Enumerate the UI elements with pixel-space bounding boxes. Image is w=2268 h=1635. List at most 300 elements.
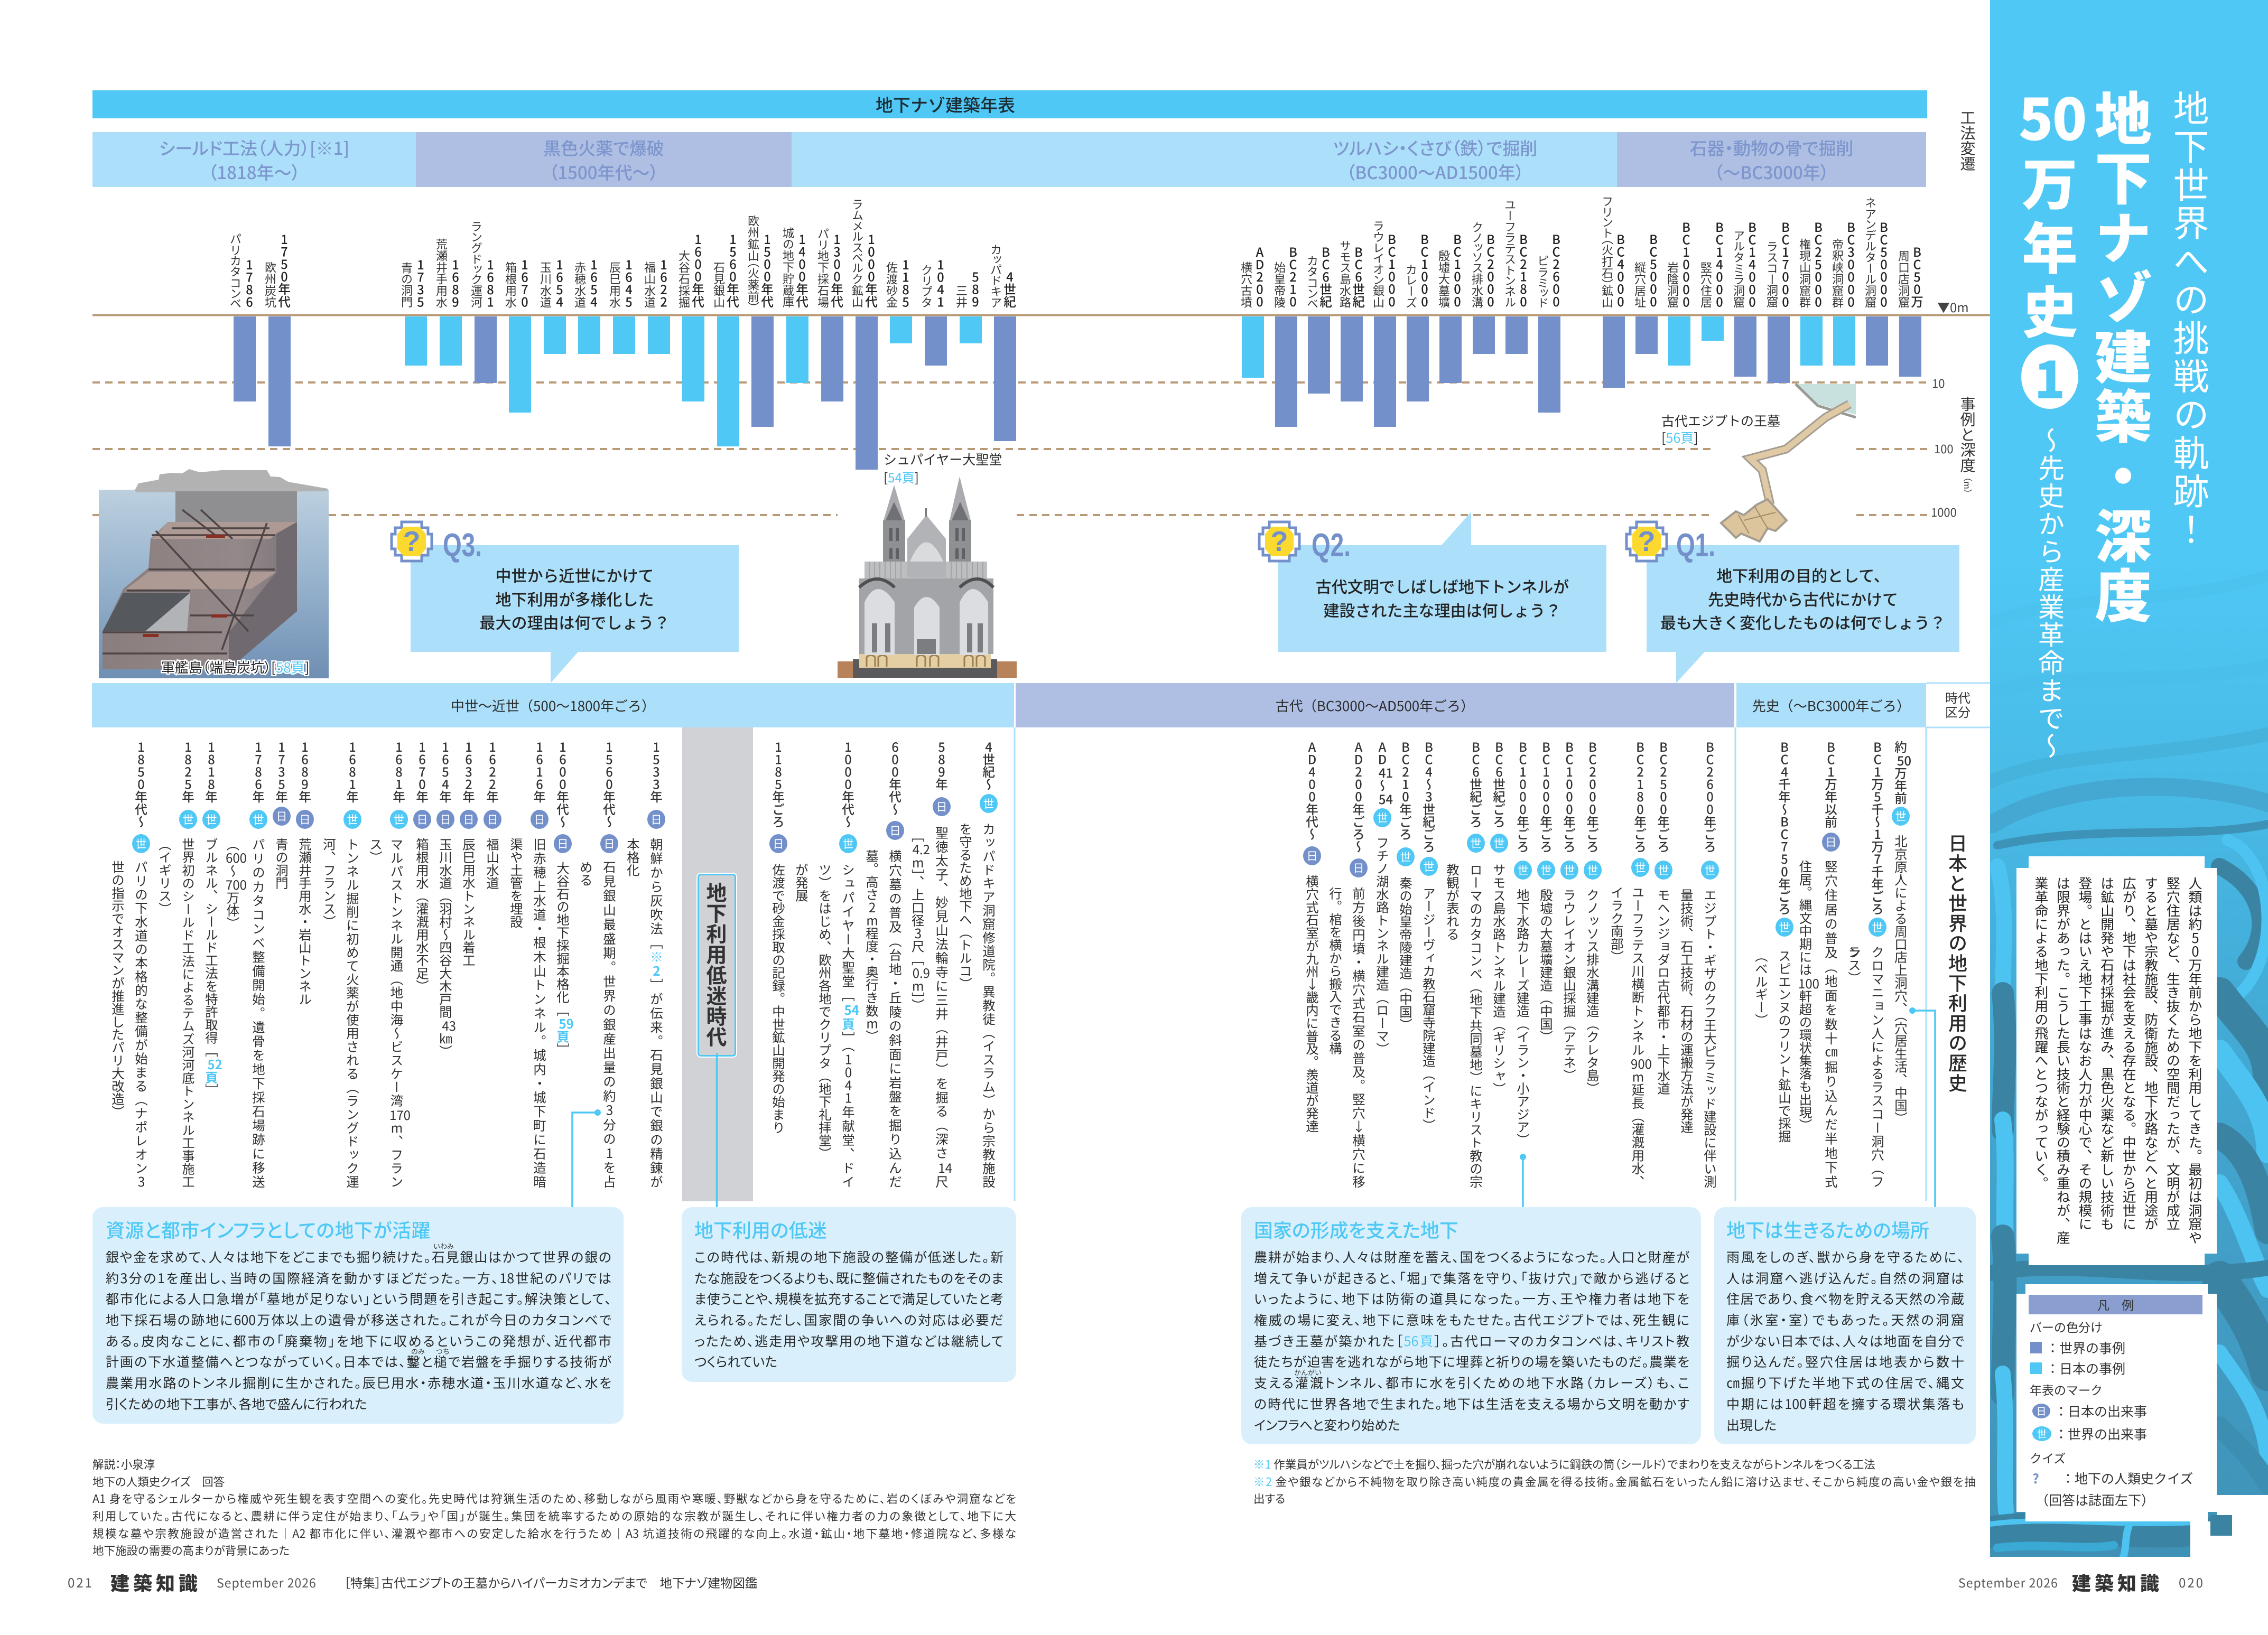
illustration caption: 軍艦島: 軍艦島（端島炭坑）[58頁] bbox=[161, 657, 309, 677]
notes: commentary and quiz answers: 規模な墓や宗教施設が造営された｜A2 都市化に伴い、灌漑や都市への安定した給水を行うため｜A3 坑道技術の飛躍的な向上。水道・鉱山・地下墓地・修道院など、多様な bbox=[92, 1525, 1016, 1541]
timeline: 1825年: （イギリス） bbox=[156, 838, 174, 915]
panel: introduction text: 広がり、地下は社会を支える存在となる。中世から近世に bbox=[2120, 876, 2139, 1231]
legend badge: japan: 日 bbox=[2036, 1404, 2046, 1418]
timeline: 1654年 bbox=[434, 740, 457, 1189]
bar: 福山水道 bbox=[642, 258, 673, 354]
body text: の時代に世界各地で生まれた。地下は生活を支える場から文明を動かす bbox=[1254, 1394, 1689, 1413]
bar: カッパドキア: 4世紀 bbox=[1001, 270, 1019, 308]
timeline: BC6世紀 Samos: BC6世紀ごろ bbox=[1490, 741, 1508, 828]
axis label: 工法変遷: 工法変遷 bbox=[1957, 110, 1979, 171]
timeline: BC2600: 量技術、石工技術、石材の運搬方法が発達 bbox=[1678, 889, 1696, 1134]
timeline: BC1000 Qanat: 地下水路カレーズ建造（イラン・小アジア） bbox=[1514, 889, 1532, 1146]
bar: カレーズ: BC1000 bbox=[1416, 233, 1434, 308]
panel: introduction text bbox=[2016, 856, 2217, 1265]
timeline: 1818年: 52 bbox=[207, 1054, 222, 1073]
timeline: 1670年: 1670年 bbox=[413, 741, 431, 803]
timeline: 1850年代: 世 bbox=[135, 836, 147, 852]
footer: right page: September 2026 bbox=[1958, 1573, 2058, 1591]
bar: 赤穂水道 bbox=[572, 258, 603, 354]
timeline: BC1万年以前: 住居。縄文中期には 軒超の環状集落も出現） bbox=[1796, 860, 1815, 1132]
panel: legend: バーの色分け bbox=[2030, 1318, 2103, 1335]
bar: ラスコー洞窟 bbox=[1768, 190, 1790, 383]
timeline: 1600年代: 大谷石の地下採掘本格化［ 頁 ］ bbox=[554, 862, 572, 1056]
timeline: 1632年: 辰巳用水トンネル着工 bbox=[460, 838, 478, 967]
timeline: 約50万年前 bbox=[1889, 740, 1912, 1189]
method band: shield bbox=[92, 132, 416, 187]
quiz Q3 text: 地下利用が多様化した bbox=[496, 586, 654, 610]
scale label: 100: 100 bbox=[1934, 440, 1954, 457]
timeline: 1850年代: パリの下水道の本格的な整備が始まる（ナポレオン3 bbox=[132, 861, 151, 1188]
quiz Q3 icon bbox=[390, 520, 433, 563]
timeline: 1632年: 1632年 bbox=[460, 741, 478, 803]
panel: 国家の形成 bbox=[1241, 1207, 1701, 1444]
period band: prehistory bbox=[1736, 683, 1926, 727]
body text: 増えて争いが起きると、「堀」で集落を守り、「抜け穴」で敵から逃げると bbox=[1254, 1268, 1689, 1287]
timeline: BC1万5千: BC1万5千〜1万7千年ごろ bbox=[1869, 741, 1886, 915]
gray strip: 低迷 period bbox=[682, 727, 753, 1201]
bar: パリ地下採石場 bbox=[821, 190, 843, 401]
timeline: 600年代 bbox=[860, 740, 907, 1189]
quiz Q1 text: 地下利用の目的として、 bbox=[1716, 563, 1890, 586]
timeline: BC1000 Yinxu bbox=[1535, 740, 1558, 1189]
body text: 都市化による人口急増が「墓地が足りない」という問題を引き起こす。解決策として、 bbox=[106, 1289, 611, 1308]
timeline: 1818年: 1818年 bbox=[202, 741, 220, 803]
timeline: AD41〜54: AD 〜 bbox=[1373, 741, 1391, 792]
bar: 青の洞門: 青の洞門 bbox=[398, 262, 415, 308]
timeline: 1689年: 1689年 bbox=[296, 741, 314, 803]
side panel: marble background bbox=[1990, 0, 2268, 1557]
bar: フリント鉱山 bbox=[1603, 190, 1625, 388]
bar: 始皇帝陵: 始皇帝陵 bbox=[1271, 261, 1288, 308]
timeline: 1622年: 福山水道 bbox=[484, 838, 502, 890]
bar: 欧州炭坑 bbox=[262, 233, 293, 446]
timeline: 1622年 bbox=[481, 740, 504, 1189]
timeline: 約50万年前: 約 万年前 bbox=[1892, 741, 1910, 804]
bar: 殷墟大墓壙: BC1000 bbox=[1448, 233, 1466, 308]
timeline: 1600年代 bbox=[551, 740, 574, 1189]
timeline: BC1000 Laurion: BC1000年ごろ bbox=[1560, 741, 1578, 853]
scale label: 0m: ▼0m bbox=[1937, 297, 1969, 316]
body text: 約3分の1を産出し、当時の国際経済を動かすほどだった。一方、18世紀のパリでは bbox=[106, 1268, 611, 1287]
bar: 竪穴住居: 竪穴住居 bbox=[1698, 261, 1715, 308]
bar: 佐渡砂金: 佐渡砂金 bbox=[884, 261, 900, 308]
timeline: BC1万年以前 bbox=[1796, 740, 1843, 1189]
notes: footnotes: ※2 金や銀などから不純物を取り除き高い純度の貴金属を得る技術。金属鉱石をいったん鉛に溶け込ませ、そこから純度の高い金や銀を抽 bbox=[1253, 1473, 1976, 1490]
footer: left page bbox=[68, 1572, 770, 1593]
timeline: AD41〜54 bbox=[1371, 740, 1394, 1189]
bar: 青の洞門: 1735 bbox=[412, 258, 430, 308]
timeline: 1681年 Malpas: 1681年 bbox=[390, 741, 408, 803]
footer: left page: 建築知識 bbox=[110, 1568, 201, 1596]
timeline: 1616年: 1616年 bbox=[531, 741, 549, 803]
timeline: BC2000 bbox=[1581, 740, 1604, 1189]
side title: subtitle: 〜先史から産業革命まで〜 bbox=[2032, 427, 2070, 760]
timeline: BC2180 bbox=[1605, 740, 1652, 1189]
timeline: 589年: 日 bbox=[936, 799, 947, 815]
timeline: 1616年: 渠や土管を埋設 bbox=[507, 838, 526, 928]
chart: depth bars with labels bbox=[227, 196, 1926, 470]
quiz Q2 icon bbox=[1258, 520, 1301, 563]
scale label: 1000: 1000 bbox=[1931, 503, 1957, 520]
bar: 石見銀山: 石見銀山 bbox=[711, 261, 728, 308]
footer: left page: ［特集］古代エジプトの王墓からハイパーカミオカンデまで 地下ナゾ建物図鑑 bbox=[344, 1573, 757, 1591]
notes: footnotes: 出する bbox=[1253, 1490, 1285, 1507]
period band: prehistory: 先史（〜BC3000年ごろ） bbox=[1752, 695, 1910, 715]
footer: right page: 020 bbox=[2179, 1573, 2205, 1591]
body text: 地下採石場の跡地に600万体以上の遺骨が移送された。これが今日のカタコンベで bbox=[106, 1310, 611, 1329]
timeline: 1000年代: ツ）をはじめ、欧州各地でクリプタ（地下礼拝堂） bbox=[816, 863, 834, 1160]
bar: 赤穂水道: 赤穂水道 bbox=[572, 261, 589, 308]
bar: 縦穴居址: 縦穴居址 bbox=[1632, 261, 1649, 308]
illustration caption: tomb bbox=[1661, 412, 1782, 447]
timeline: BC6世紀 Samos bbox=[1488, 740, 1511, 1189]
bar: ユーフラテストンネル: ユーフラテストンネル bbox=[1502, 199, 1519, 308]
bar: ラングドック運河: 1681 bbox=[481, 258, 499, 308]
bar: 箱根用水: 箱根用水 bbox=[503, 261, 519, 308]
timeline: 600年代: 墓。高さ2m程度・奥行き数m） bbox=[863, 849, 881, 1043]
quiz Q3 text: 最大の理由は何でしょう？ bbox=[480, 610, 670, 633]
bar: ラングドック運河 bbox=[468, 221, 499, 383]
bar: 大谷石採掘: 大谷石採掘 bbox=[676, 250, 693, 308]
timeline: 1689年: 荒瀬井手用水・岩山トンネル bbox=[296, 838, 314, 1005]
timeline: BC1000 Laurion bbox=[1558, 740, 1581, 1189]
timeline: 1786年: （ 〜 万体） bbox=[224, 838, 242, 930]
body text: ある。皮肉なことに、都市の「廃棄物」を地下に収めるというこの発想が、近代都市 bbox=[106, 1331, 611, 1350]
bar: 辰巳用水 bbox=[607, 258, 638, 354]
legend badge: world bbox=[2032, 1426, 2051, 1441]
bar: 権現山洞窟群 bbox=[1800, 190, 1823, 366]
bar: カタコンベ: BC6世紀 bbox=[1317, 246, 1335, 308]
timeline: 1681年 Malpas: 170 bbox=[389, 1105, 411, 1123]
timeline: BC1000 Laurion: 世 bbox=[1564, 862, 1575, 878]
method band: stone tools: （〜BC3000年） bbox=[1714, 159, 1829, 184]
body text: 基づき王墓が築かれた［56頁］。古代ローマのカタコンベは、キリスト教 bbox=[1254, 1331, 1689, 1350]
timeline: 1632年: 日 bbox=[463, 811, 475, 827]
timeline: 1818年 bbox=[200, 740, 223, 1189]
timeline: 1850年代 bbox=[106, 740, 153, 1189]
timeline: BC210: 秦の始皇帝陵建造（中国） bbox=[1397, 876, 1415, 1031]
timeline: 1670年: 箱根用水（灌漑用水不足） bbox=[413, 838, 432, 993]
illustration caption: tomb: [56頁] bbox=[1661, 428, 1698, 447]
footer: right page: 建築知識 bbox=[2072, 1568, 2163, 1596]
panel: introduction text: は限界があった。こうした長い技術と経験の積み重ねが、産 bbox=[2053, 876, 2073, 1245]
timeline: 1681年 Languedoc: トンネル掘削に初めて火薬が使用される（ラングドック運 bbox=[343, 838, 362, 1188]
timeline: 1786年: 700 bbox=[226, 875, 247, 893]
timeline: 1185年: 1185年ごろ bbox=[769, 741, 787, 828]
timeline: 1786年: パリのカタコンベ整備開始。遺骨を地下採石場跡に移送 bbox=[249, 838, 268, 1188]
timeline: 1000年代 bbox=[790, 740, 860, 1189]
panel: legend: クイズ bbox=[2030, 1449, 2066, 1466]
timeline: 1735年: 日 bbox=[276, 808, 287, 824]
timeline: BC210: 世 bbox=[1400, 849, 1411, 865]
timeline: 1681年 Languedoc: 世 bbox=[347, 811, 358, 827]
notes: commentary and quiz answers: 地下の人類史クイズ 回答 bbox=[92, 1473, 225, 1490]
connector lines with dots bbox=[565, 1004, 1945, 1215]
timeline: 1654年: 43 bbox=[442, 1016, 456, 1034]
timeline: 約50万年前: 50 bbox=[1897, 751, 1911, 769]
timeline: 1600年代: 日 bbox=[557, 836, 569, 852]
timeline: 1735年: 1735年 bbox=[273, 741, 291, 803]
body text: 雨風をしのぎ、獣から身を守るために、 bbox=[1726, 1247, 1964, 1266]
bar: 城の地下貯蔵庫: 1400年代 bbox=[793, 233, 811, 308]
timeline: BC1000 Qanat bbox=[1511, 740, 1535, 1189]
timeline: AD41〜54: 54 bbox=[1379, 789, 1393, 808]
body text: 掘り込んだ。竪穴住居は地表から数十 bbox=[1726, 1352, 1964, 1371]
quiz Q2 label: Q2. bbox=[1312, 527, 1351, 564]
timeline: AD400 bbox=[1300, 740, 1324, 1189]
timeline: 1786年: 世 bbox=[253, 811, 264, 827]
quiz Q1 text: 先史時代から古代にかけて bbox=[1708, 586, 1898, 610]
bar: ネアンデルタール洞窟: ネアンデルタール洞窟 bbox=[1862, 197, 1879, 308]
bar: 三井 bbox=[960, 190, 982, 343]
timeline: 1786年: 600 bbox=[226, 848, 247, 866]
bar: 荒瀬井手用水 bbox=[433, 238, 464, 366]
timeline: 589年: ［ m］、上口径3尺［ m］） bbox=[909, 829, 927, 1012]
period band label bbox=[1929, 690, 1987, 718]
timeline: 1681年 Languedoc: 1681年 bbox=[343, 741, 361, 803]
timeline: 約50万年前: 北京原人による周口店上洞穴、（穴居生活、中国） bbox=[1892, 835, 1910, 1125]
bar: 横穴古墳: AD200 bbox=[1251, 246, 1269, 308]
quiz Q1 label: Q1. bbox=[1676, 527, 1715, 564]
timeline: BC1万5千 bbox=[1843, 740, 1889, 1189]
timeline: BC2180: 世 bbox=[1635, 859, 1646, 875]
timeline: BC2180: BC2180年ごろ bbox=[1631, 741, 1649, 853]
timeline: 1185年 bbox=[767, 740, 790, 1189]
body text: 中期には100軒超を擁する環状集落も bbox=[1726, 1394, 1964, 1413]
axis label: 事例と深度: 事例と深度 （m） bbox=[1957, 396, 1979, 498]
panel: legend: ：世界の事例 bbox=[2046, 1338, 2125, 1357]
timeline: BC2600 bbox=[1675, 740, 1722, 1189]
timeline: 589年: 4.2 bbox=[913, 839, 930, 858]
period band label: 時代 bbox=[1945, 688, 1970, 706]
body text: ま使うことや、規模を拡充することで満足していたと考 bbox=[694, 1289, 1003, 1308]
bar: クリプタ: 1041 bbox=[932, 258, 950, 308]
bar: 玉川水道 bbox=[537, 258, 569, 354]
bar: ラスコー洞窟: ラスコー洞窟 bbox=[1764, 241, 1781, 308]
heading: 国家の形成を支えた地下 bbox=[1254, 1216, 1458, 1243]
timeline: AD200: 行。棺を横から搬入できる構 bbox=[1326, 887, 1345, 1054]
timeline: BC2500: 世 bbox=[1658, 862, 1669, 878]
period band: ancient: 古代（BC3000〜AD500年ごろ） bbox=[1276, 695, 1474, 715]
bar: ラウレイオン銀山: ラウレイオン銀山 bbox=[1370, 220, 1387, 308]
body text: つくられていた bbox=[694, 1352, 777, 1371]
bar: ラングドック運河: ラングドック運河 bbox=[468, 221, 485, 308]
body text: 住居であり、食べ物を貯える天然の冷蔵 bbox=[1726, 1289, 1964, 1308]
quiz Q3 speech bubble bbox=[411, 545, 739, 684]
timeline: 1818年: ブルネル、シールド工法を特許取得［ 頁 ］ bbox=[202, 838, 221, 1097]
timeline: 1533年: 1533年 bbox=[647, 741, 665, 803]
timeline: BC4千年: 世 bbox=[1779, 919, 1790, 935]
timeline: BC1000 Qanat: BC1000年ごろ bbox=[1514, 741, 1532, 853]
method band: stone tools: 石器・動物の骨で掘削 bbox=[1690, 135, 1853, 160]
panel: 地下利用の低迷 bbox=[682, 1207, 1016, 1382]
timeline: 1533年: 本格化 bbox=[624, 838, 643, 876]
timeline: BC4〜3世紀: BC4〜3世紀ごろ bbox=[1420, 741, 1438, 853]
timeline: BC1万年以前: BC1万年以前 bbox=[1822, 741, 1840, 828]
bar: 辰巳用水: 1645 bbox=[620, 258, 638, 308]
timeline: BC6世紀 Rome bbox=[1441, 740, 1488, 1189]
timeline: 1600年代: 1600年代〜 bbox=[554, 741, 572, 828]
panel: legend bbox=[2016, 1284, 2217, 1521]
timeline: 1560年代: 石見銀山最盛期。世界の銀産出量の約3分の1を占 bbox=[600, 861, 619, 1188]
bar: 荒瀬井手用水: 1689 bbox=[447, 258, 464, 308]
timeline: 1681年 Malpas bbox=[364, 740, 411, 1189]
decorative small square bbox=[2210, 1515, 2232, 1536]
timeline: BC4〜3世紀: アージーヴィカ教石窟寺院建造（インド） bbox=[1420, 887, 1438, 1132]
footer: left page: September 2026 bbox=[217, 1573, 317, 1591]
body text: が少ない日本では、人々は地面を自分で bbox=[1726, 1331, 1964, 1350]
body text: 引くための地下工事が、各地で盛んに行われた bbox=[106, 1394, 367, 1413]
callout: 地下利用低迷時代: 地下利用低迷時代 bbox=[702, 882, 731, 1047]
timeline: 589年 bbox=[907, 740, 953, 1189]
illustration caption: Speyer bbox=[884, 450, 1002, 486]
side title: lead: 地下世界への挑戦の軌跡！ bbox=[2165, 90, 2217, 549]
bar: 欧州鉱山 bbox=[751, 190, 774, 427]
body text: 人は洞窟へ逃げ込んだ。自然の洞窟は bbox=[1726, 1268, 1964, 1287]
period band: ancient bbox=[1016, 683, 1734, 727]
scale label: 10: 10 bbox=[1932, 375, 1945, 391]
timeline: 4世紀: を守るため地下へ（トルコ） bbox=[956, 823, 975, 990]
timeline: AD41〜54: 世 bbox=[1377, 810, 1388, 826]
timeline: BC1000 Yinxu: 殷墟の大墓壙建造（中国） bbox=[1537, 889, 1556, 1043]
side title: main line 2: 50 bbox=[2019, 74, 2086, 157]
timeline: 4世紀 bbox=[954, 740, 1000, 1189]
bar: フリント鉱山: フリント（火打石）鉱山 bbox=[1599, 196, 1616, 308]
bar: 石見銀山 bbox=[711, 233, 742, 446]
timeline: 1670年: 日 bbox=[416, 811, 428, 827]
timeline: AD41〜54: 41 bbox=[1379, 763, 1393, 781]
panel: legend: ：世界の出来事 bbox=[2055, 1424, 2147, 1443]
bar: 箱根用水 bbox=[503, 258, 534, 413]
panel: 地下は生きるための場所 bbox=[1714, 1207, 1976, 1444]
timeline: BC2000: クノッソス排水溝建造（クレタ島） bbox=[1584, 889, 1602, 1095]
bar: ラムメルスベルク鉱山: 1000年代 bbox=[862, 233, 880, 308]
legend heading bbox=[2029, 1295, 2202, 1314]
notes: commentary and quiz answers bbox=[92, 1456, 1016, 1559]
timeline: 1560年代: める bbox=[577, 861, 596, 886]
timeline: BC4千年 bbox=[1750, 740, 1796, 1189]
callout: 地下利用低迷時代 bbox=[698, 874, 736, 1057]
bar: 岩陰洞窟 bbox=[1668, 190, 1690, 366]
timeline: BC6世紀 Rome: ローマのカタコンベ（地下共同墓地）にキリスト教の宗 bbox=[1467, 863, 1485, 1188]
timeline: 1654年: 玉川水道（羽村〜四谷大木戸間 ㎞） bbox=[436, 838, 455, 1058]
timeline: 1681年 Languedoc bbox=[318, 740, 364, 1189]
timeline: BC6世紀 Rome: BC6世紀ごろ bbox=[1467, 741, 1485, 828]
body text: 支える灌漑トンネル、都市に水を引くための地下水路（カレーズ）も、こ bbox=[1254, 1373, 1689, 1392]
bar: アルタミラ洞窟 bbox=[1734, 190, 1756, 377]
illustration: Speyer Cathedral bbox=[838, 473, 1017, 679]
bar: カレーズ bbox=[1407, 190, 1429, 401]
method band: stone tools bbox=[1617, 132, 1926, 187]
bar: 縦穴居址 bbox=[1635, 190, 1658, 354]
panel: introduction text: 竪穴住居など、生き抜くための空間だったが、文明が成立 bbox=[2163, 876, 2183, 1231]
timeline: 589年: 聖徳太子、妙見山法輪寺に三井（井戸）を掘る（深さ 尺 bbox=[933, 826, 951, 1188]
bar: 佐渡砂金 bbox=[890, 190, 912, 343]
body text bbox=[106, 1247, 611, 1415]
bar: ピラミッド: BC2600 bbox=[1547, 233, 1565, 308]
period band label: 区分 bbox=[1945, 702, 1970, 721]
timeline: BC1000 Yinxu: BC1000年ごろ bbox=[1537, 741, 1555, 853]
heading: 地下は生きるための場所 bbox=[1726, 1216, 1929, 1243]
timeline: 1681年 Malpas: 世 bbox=[393, 811, 405, 827]
depth scale lines bbox=[92, 314, 1990, 516]
bar: ラムメルスベルク鉱山: ラムメルスベルク鉱山 bbox=[849, 199, 866, 308]
timeline: 1600年代: 59 bbox=[559, 1014, 574, 1032]
legend badge: japan bbox=[2032, 1404, 2050, 1418]
body text bbox=[1726, 1247, 1964, 1435]
bar: 岩陰洞窟: 岩陰洞窟 bbox=[1665, 261, 1681, 308]
timeline: 1533年: 日 bbox=[651, 811, 662, 827]
panel: 資源と都市インフラ: のみ bbox=[411, 1346, 425, 1356]
timeline: BC4〜3世紀: 世 bbox=[1424, 858, 1434, 874]
bar: 縦穴居址: BC5000 bbox=[1644, 233, 1662, 308]
bar: 権現山洞窟群: BC25000 bbox=[1809, 221, 1827, 308]
panel: legend: ：日本の事例 bbox=[2046, 1359, 2125, 1378]
body text: 計画の下水道整備へとつながっていく。日本では、鑿と槌で岩盤を手掘りする技術が bbox=[106, 1352, 611, 1371]
timeline: 1689年 bbox=[293, 740, 317, 1189]
timeline: 1850年代: 1850年代〜 bbox=[132, 741, 150, 828]
body text: ったため、逃走用や攻撃用の地下道などは継続して bbox=[694, 1331, 1003, 1350]
panel: legend: 年表のマーク bbox=[2030, 1380, 2103, 1398]
bar: 三井: 三井 bbox=[953, 285, 970, 308]
method band: pick and wedge: ツルハシ・くさび（鉄）で掘削 bbox=[1333, 135, 1537, 160]
panel: legend: ：地下の人類史クイズ bbox=[2061, 1469, 2193, 1488]
timeline: 1670年 bbox=[411, 740, 434, 1189]
timeline: BC2500: BC2500年ごろ bbox=[1654, 741, 1672, 853]
method band: pick and wedge: （BC3000〜AD1500年） bbox=[1346, 159, 1524, 184]
bar: ラウレイオン銀山 bbox=[1374, 190, 1396, 427]
quiz Q2 icon: ? bbox=[1270, 526, 1288, 557]
bar: 始皇帝陵 bbox=[1275, 190, 1297, 427]
side title: main line 2 bbox=[2010, 74, 2090, 413]
timeline: BC4千年: BC4千年〜BC750年ごろ bbox=[1776, 741, 1793, 915]
timeline: AD200 bbox=[1324, 740, 1370, 1189]
timeline: 1185年: 日 bbox=[773, 836, 784, 852]
quiz Q3 label: Q3. bbox=[443, 527, 482, 564]
method band: shield: シールド工法（人力）[※1] bbox=[159, 135, 349, 160]
timeline: BC1万年以前: 日 bbox=[1825, 834, 1837, 850]
quiz Q3 icon: ? bbox=[403, 526, 421, 557]
timeline: 1825年: 1825年 bbox=[179, 741, 197, 803]
bar: 福山水道: 1622 bbox=[655, 258, 673, 308]
bar: 竪穴住居: BC14000 bbox=[1711, 221, 1728, 308]
bar: 帝釈峡洞窟群: BC30000 bbox=[1842, 221, 1860, 308]
timeline: BC6世紀 Samos: サモス島水路トンネル建造（ギリシャ） bbox=[1490, 863, 1509, 1095]
panel: 国家の形成: かんがい bbox=[1294, 1367, 1322, 1377]
method band: black powder: （1500年代〜） bbox=[549, 159, 658, 184]
bar: 荒瀬井手用水: 荒瀬井手用水 bbox=[433, 238, 450, 308]
bar: 横穴古墳: 横穴古墳 bbox=[1238, 261, 1255, 308]
timeline: BC2600: 世 bbox=[1705, 862, 1715, 878]
quiz Q2 speech bubble bbox=[1278, 511, 1607, 652]
timeline: BC1000 Qanat: 世 bbox=[1518, 862, 1528, 878]
quiz Q1 icon: ? bbox=[1638, 526, 1655, 557]
bar: 赤穂水道: 1654 bbox=[585, 258, 603, 308]
timeline: 1000年代: シュパイヤー大聖堂［ 頁 ］（1041年献堂、ドイ bbox=[839, 863, 858, 1188]
body text bbox=[694, 1247, 1003, 1372]
bar: ネアンデルタール洞窟: BC50000 bbox=[1875, 221, 1893, 308]
method band: black powder: 黒色火薬で爆破 bbox=[543, 135, 664, 160]
timeline: 1689年: 日 bbox=[299, 811, 311, 827]
bar: フリント鉱山: BC4000 bbox=[1612, 233, 1630, 308]
timeline: 1533年 bbox=[621, 740, 668, 1189]
bar: ピラミッド: ピラミッド bbox=[1535, 255, 1551, 308]
bar: 欧州鉱山: 欧州鉱山（火薬前） bbox=[745, 215, 762, 308]
bar: 玉川水道: 玉川水道 bbox=[537, 261, 554, 308]
notes: commentary and quiz answers: 解説：小泉淳 bbox=[92, 1456, 155, 1472]
body text: この時代は、新規の地下施設の整備が低迷した。新 bbox=[694, 1247, 1003, 1266]
bar: 殷墟大墓壙 bbox=[1439, 190, 1462, 383]
